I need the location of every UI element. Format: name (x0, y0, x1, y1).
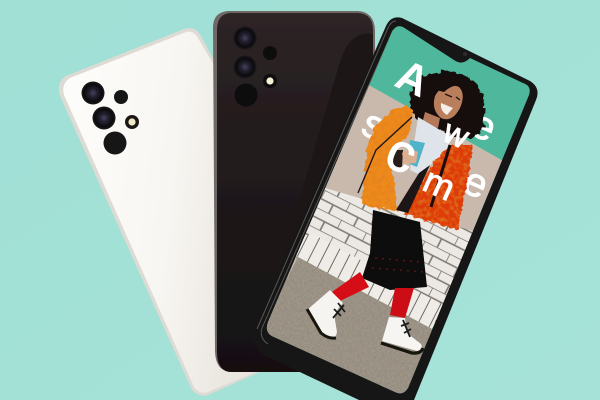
person (307, 71, 485, 353)
white phone cameras (82, 82, 139, 154)
soldier-course bricks (296, 234, 442, 328)
grain texture (268, 258, 432, 392)
white phone body (59, 28, 264, 396)
lettering over the person: A (389, 51, 437, 107)
lettering behind the person: e (457, 159, 495, 208)
dark sleeve gap (393, 150, 403, 168)
screen contents (266, 26, 530, 394)
lettering over the person: w (437, 112, 475, 156)
front phone body (253, 17, 538, 400)
hand (402, 150, 418, 164)
right red leg (390, 288, 414, 318)
teal screen backdrop (266, 26, 530, 394)
right white boot (382, 317, 422, 351)
neck (422, 112, 440, 128)
lettering over the person (387, 63, 470, 201)
white phone, rear view (59, 28, 264, 396)
hair (410, 71, 485, 140)
blue cup (407, 140, 425, 167)
brick wall (296, 188, 473, 329)
lettering behind the person (362, 116, 494, 197)
pavement (266, 257, 432, 394)
black phone back fold panel (270, 34, 373, 372)
black phone cameras (234, 26, 277, 106)
black bag strap (358, 117, 412, 193)
right boot sole (381, 343, 423, 353)
dark gap under the top (396, 165, 430, 213)
lettering behind the person: s (356, 101, 392, 149)
pavement grain (268, 258, 432, 392)
left white boot (307, 290, 343, 338)
white phone back panel (63, 32, 262, 393)
beige wall (268, 85, 502, 320)
eyes (445, 94, 460, 100)
left red leg (332, 272, 369, 302)
black skirt (362, 210, 427, 290)
left boot sole (307, 309, 336, 338)
black phone frame (213, 11, 375, 372)
lettering over the person: c (377, 120, 426, 186)
front camera (463, 52, 467, 56)
smile (441, 103, 453, 115)
red coat (404, 145, 473, 230)
boot laces (333, 303, 411, 337)
orange coat (362, 105, 413, 212)
black phone, rear view (213, 11, 375, 372)
lettering behind the person: e (465, 102, 503, 151)
skirt red pattern (372, 258, 424, 272)
lettering over the person: m (417, 159, 461, 209)
front phone with screen (250, 10, 550, 400)
black front strap (431, 145, 450, 207)
front phone bezel highlights (257, 21, 396, 344)
white top (410, 117, 452, 175)
hair fringe (438, 84, 456, 92)
face (434, 85, 463, 119)
black phone back panel (217, 13, 373, 372)
